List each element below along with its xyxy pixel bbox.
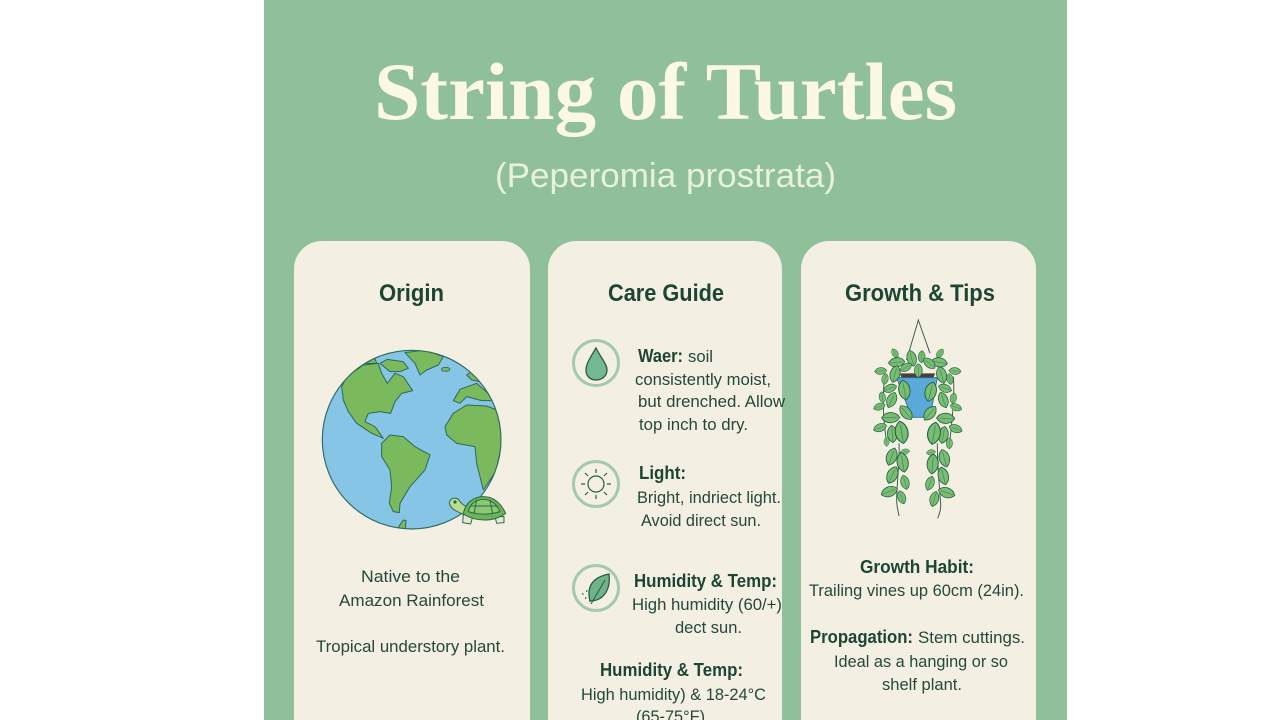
- text: humidity and temp 2: Humidity & Temp:: [600, 660, 743, 680]
- text: origin description: [316, 567, 505, 656]
- text: humidity and temp 1: [632, 571, 782, 637]
- heading: origin: Origin: [379, 280, 444, 307]
- text: light: [637, 463, 781, 530]
- text: humidity and temp 2: High humidity) & 18-24°C: [581, 685, 766, 704]
- heading: growth and tips: Growth & Tips: [845, 280, 995, 307]
- icon: water drop: [574, 340, 618, 386]
- text: propagation: Stem cuttings.: [918, 628, 1025, 647]
- text: water: Waer:: [638, 346, 683, 366]
- text: propagation: [810, 627, 1025, 694]
- text: light: Light:: [639, 463, 686, 483]
- subtitle: (Peperomia prostrata): [495, 157, 836, 195]
- text: propagation: Ideal as a hanging or so: [834, 652, 1008, 671]
- panel: growth and tips: [801, 241, 1036, 720]
- text: water: soil: [688, 347, 713, 366]
- text: humidity and temp 1: Humidity & Temp:: [634, 571, 777, 591]
- text: light: Avoid direct sun.: [641, 511, 761, 530]
- icon: turtle: [449, 497, 506, 524]
- text: humidity and temp 2: [581, 660, 766, 720]
- text: origin description: Tropical understory plant.: [316, 637, 505, 656]
- text: origin description: Amazon Rainforest: [339, 591, 484, 610]
- text: propagation: shelf plant.: [882, 675, 962, 694]
- icon: globe with turtle: [322, 350, 506, 530]
- panel: origin: [294, 241, 530, 720]
- heading: care guide: Care Guide: [608, 280, 724, 307]
- text: propagation: Propagation:: [810, 627, 913, 647]
- panel: care guide: [548, 241, 786, 720]
- icon: sun: [574, 462, 618, 506]
- text: water: but drenched. Allow: [638, 392, 786, 411]
- icon: leaf: [574, 566, 618, 610]
- text: origin description: Native to the: [361, 567, 460, 586]
- text: growth habit: Trailing vines up 60cm (24in).: [809, 581, 1024, 600]
- text: light: Bright, indriect light.: [637, 488, 781, 507]
- icon: hanging plant: [872, 320, 964, 518]
- text: water: [635, 346, 786, 434]
- title: String of Turtles: [374, 46, 957, 137]
- text: water: top inch to dry.: [639, 415, 748, 434]
- text: growth habit: Growth Habit:: [860, 557, 974, 577]
- text: water: consistently moist,: [635, 370, 771, 389]
- text: humidity and temp 1: dect sun.: [675, 618, 742, 637]
- text: growth habit: [809, 557, 1024, 600]
- text: humidity and temp 1: High humidity (60/+): [632, 595, 782, 614]
- green background panel: [264, 0, 1067, 720]
